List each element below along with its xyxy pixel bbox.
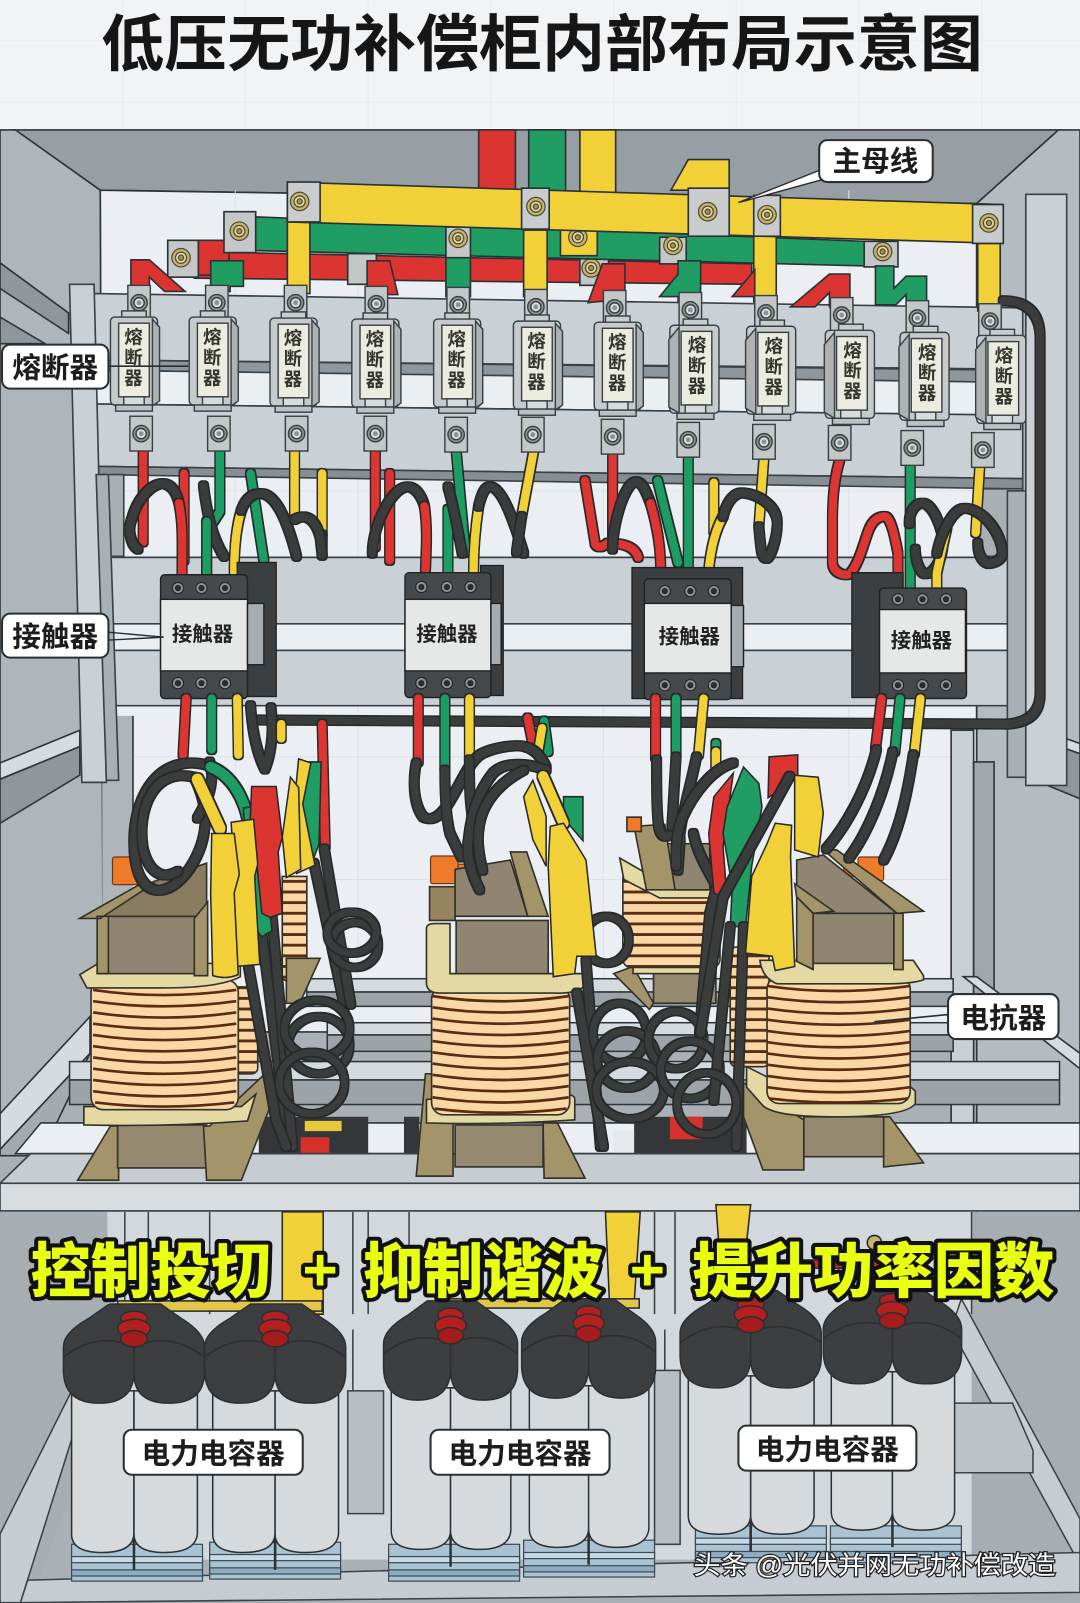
panel: capacitor group 3 (680, 1287, 962, 1563)
contactor 2: 接触器 (416, 623, 478, 646)
fuse 12: 熔断器 (993, 345, 1014, 407)
contactor 2 (405, 566, 503, 697)
fuse 1: 熔断器 (122, 326, 143, 389)
orange terminal 2 (431, 856, 477, 884)
red busbar (168, 240, 752, 285)
yellow leads to capacitors (118, 1205, 892, 1314)
fuse 2: 熔断器 (201, 326, 222, 389)
fuse 2 (189, 285, 238, 451)
fuse 10 (824, 298, 874, 460)
reactor 3 back middle (614, 817, 720, 1009)
fuse 4: 熔断器 (364, 329, 385, 391)
label: reactor (874, 994, 1059, 1039)
reactor back unit left (282, 876, 320, 1003)
fuse 6 (513, 289, 562, 452)
title: 低压无功补偿柜内部布局示意图 (101, 10, 983, 79)
reactor 2 (416, 852, 585, 1178)
fuse 8 (669, 292, 719, 457)
fuses row (110, 285, 1026, 467)
fuse 3 (270, 285, 319, 451)
left post (70, 284, 119, 782)
fuse 11: 熔断器 (916, 342, 937, 404)
orange terminal 1 (113, 857, 139, 885)
panel: capacitor group 1 (63, 1304, 346, 1581)
long black cable (256, 301, 1040, 724)
fuse 9: 熔断器 (763, 336, 784, 398)
watermark: 头条 @光伏并网无功补偿改造 (693, 1552, 1055, 1580)
fuse 3: 熔断器 (282, 327, 303, 390)
fuse 5 (434, 287, 483, 452)
fuse 9 (746, 296, 796, 459)
fuse 6: 熔断器 (525, 331, 546, 393)
label: main busbar (738, 140, 933, 202)
slogan: + (630, 1236, 665, 1304)
fuse 1 (110, 285, 160, 451)
slogan (31, 1236, 1054, 1306)
orange terminal 4 (844, 857, 884, 881)
reactor 4 (744, 850, 924, 1170)
reactor shelf bars (15, 979, 1080, 1154)
contactor 3: 接触器 (659, 625, 721, 648)
label: reactor: 电抗器 (960, 1003, 1047, 1035)
reactor 3 side coil (730, 947, 769, 1067)
leads reactor group 3 (648, 755, 823, 1146)
short wire stubs below contactors (183, 699, 920, 847)
label: main busbar: 主母线 (833, 146, 918, 178)
fuse 7: 熔断器 (606, 332, 627, 394)
contactor 1 (161, 562, 276, 699)
wires fuses to contactors (130, 450, 1002, 595)
fuse 8: 熔断器 (686, 335, 707, 397)
fuse 12 (972, 304, 1026, 467)
vertical feeder bars (479, 130, 616, 193)
fuse mounting plate (94, 294, 1023, 556)
caption: capacitor 2 (431, 1430, 610, 1475)
contactor 4: 接触器 (891, 629, 953, 652)
slogan: 控制投切 (31, 1238, 271, 1306)
panel: main yellow busbar (287, 160, 1003, 243)
slogan: 提升功率因数 (692, 1238, 1054, 1306)
fuse 5: 熔断器 (446, 329, 467, 391)
contactor rails (102, 557, 1023, 706)
leads reactor group 4 (826, 750, 913, 860)
slogan: + (302, 1236, 338, 1304)
right post (1007, 194, 1067, 785)
leads reactor group 2 (414, 746, 664, 1146)
label: contactor: 接触器 (12, 621, 99, 653)
caption: capacitor 3 (738, 1426, 916, 1471)
title band (0, 0, 1080, 131)
contactor 4 (852, 573, 966, 699)
contactor 1: 接触器 (172, 623, 234, 646)
label: fuse: 熔断器 (12, 352, 99, 384)
contactor 3 (632, 568, 744, 700)
fuse 7 (594, 290, 643, 454)
caption: capacitor 3: 电力电容器 (756, 1434, 899, 1466)
leads reactor group 1 (134, 759, 378, 1146)
background wires behind fuses (184, 474, 714, 562)
caption: capacitor 2: 电力电容器 (448, 1439, 592, 1471)
fuse 11 (899, 301, 949, 465)
reactor 1 (78, 863, 269, 1180)
caption: capacitor 1 (124, 1430, 303, 1475)
panel: capacitor group 2 (384, 1299, 656, 1581)
caption: capacitor 1: 电力电容器 (142, 1439, 285, 1471)
dark gap under reactors (259, 1117, 747, 1156)
bottom compartment background (0, 1212, 1080, 1603)
slogan: 抑制谐波 (363, 1238, 603, 1306)
label: contactor (2, 614, 164, 658)
busbar droppers to fuses (131, 222, 1000, 311)
label: fuse (2, 345, 188, 389)
fuse 10: 熔断器 (841, 340, 862, 402)
fuse 4 (352, 286, 401, 451)
shelf beam (0, 1154, 1080, 1211)
green busbar (224, 212, 898, 267)
